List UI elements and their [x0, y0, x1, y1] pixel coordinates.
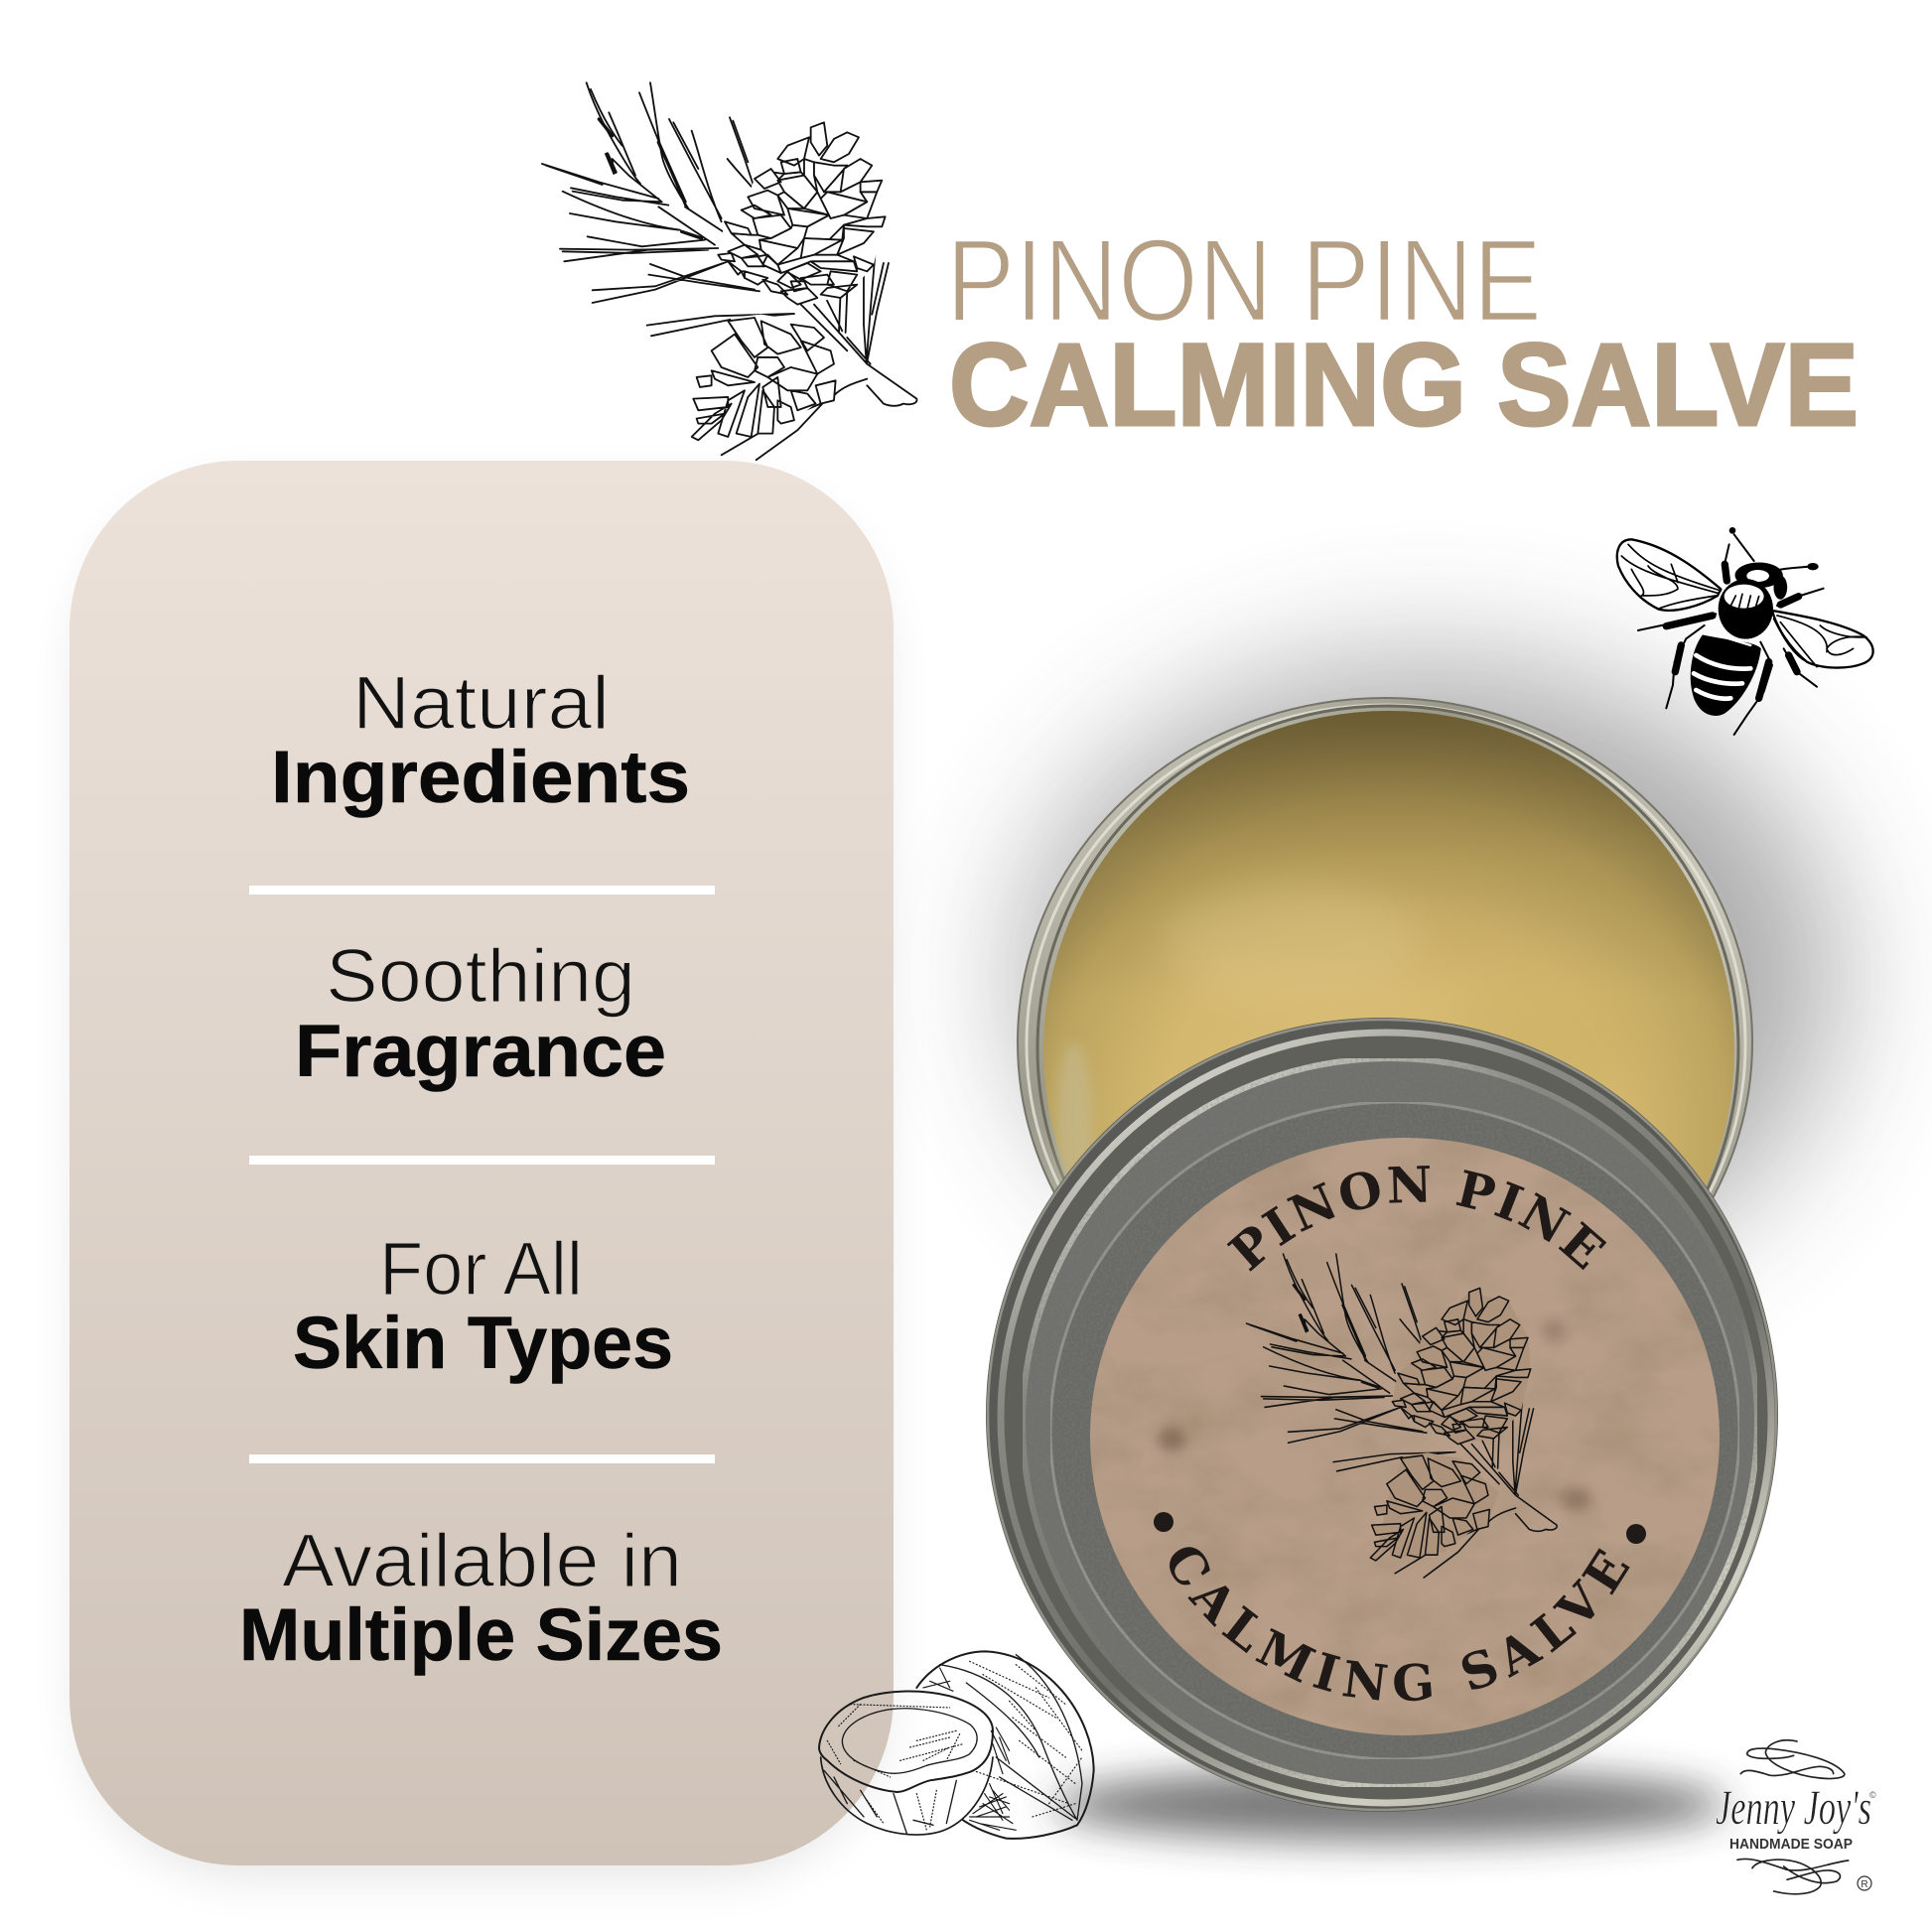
bee abdomen	[1691, 635, 1760, 715]
feature: soothing fragrance: Soothing	[326, 934, 635, 1019]
logo top flourish	[1740, 1740, 1845, 1778]
feature: available in multiple sizes: Available in	[282, 1519, 682, 1603]
bee thorax	[1721, 581, 1771, 636]
feature: natural ingredients: Natural	[352, 661, 610, 746]
label pine drawing	[1247, 1254, 1557, 1578]
label dot right	[1626, 1524, 1646, 1544]
logo registered mark	[1858, 1876, 1871, 1890]
bee head	[1735, 563, 1783, 588]
logo bottom flourish	[1737, 1859, 1849, 1894]
logo: Jenny Joy's handmade soap	[1716, 1740, 1876, 1894]
title: PINON PINE	[946, 215, 1542, 346]
feature: natural ingredients: Ingredients	[271, 736, 690, 818]
lid ground shadow	[1052, 1769, 1727, 1841]
logo copyright mark: ©	[1869, 1790, 1876, 1800]
icon: coconut	[819, 1651, 1094, 1839]
label dot left	[1154, 1512, 1173, 1532]
title	[946, 215, 1859, 451]
product: open salve tin	[1018, 698, 1752, 1391]
panel: features	[69, 461, 894, 1865]
bee antennae and legs	[1638, 528, 1824, 735]
label	[1090, 1138, 1720, 1735]
label text: bottom arc: CALMING SALVE	[1170, 1547, 1630, 1702]
feature: soothing fragrance	[295, 934, 666, 1092]
product: tin lid	[986, 1018, 1778, 1812]
feature: soothing fragrance: Fragrance	[295, 1010, 666, 1092]
tin back shadow	[1023, 660, 1837, 1296]
feature: available in multiple sizes: Multiple Sizes	[239, 1593, 723, 1676]
feature: natural ingredients	[271, 661, 690, 818]
logo registered mark: R	[1861, 1879, 1868, 1890]
panel shadow	[79, 486, 884, 1876]
label text: top arc: PINON PINE	[1227, 1166, 1606, 1272]
feature: for all skin types: Skin Types	[293, 1302, 673, 1384]
tin rim	[1018, 698, 1752, 1387]
logo subtitle: HANDMADE SOAP	[1729, 1837, 1853, 1853]
salve surface	[1043, 711, 1734, 1390]
feature: for all skin types	[293, 1227, 673, 1384]
feature: available in multiple sizes	[239, 1519, 723, 1676]
icon: pine branch	[542, 82, 917, 460]
feature: for all skin types: For All	[379, 1227, 583, 1311]
icon: bee	[1617, 528, 1873, 735]
title: CALMING SALVE	[949, 320, 1859, 451]
